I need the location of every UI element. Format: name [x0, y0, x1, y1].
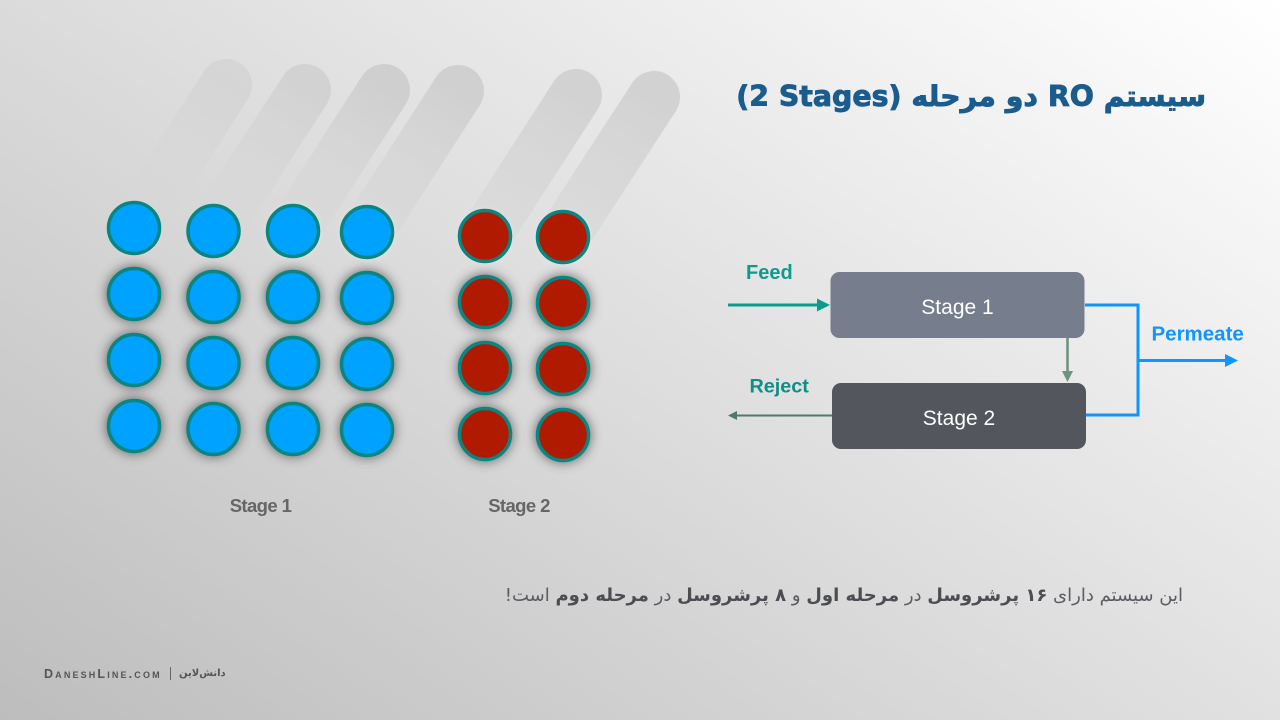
- label: feed: Feed: [746, 262, 793, 284]
- box: stage 1: Stage 1: [921, 296, 994, 319]
- footer brand: DaneshLine.com: [44, 667, 162, 681]
- arrow: feed: [728, 298, 830, 312]
- arrow: stage 1 to stage 2: [1062, 338, 1073, 382]
- box: stage 2: [832, 383, 1086, 449]
- description text: این سیستم دارای ۱۶ پرشروسل در مرحله اول و ۸ پرشروسل در مرحله دوم است!: [505, 585, 1183, 606]
- footer brand: [44, 667, 226, 681]
- vessel bodies receding in perspective: [134, 85, 654, 237]
- box: stage 2: Stage 2: [923, 407, 995, 430]
- label: permeate: Permeate: [1152, 322, 1244, 346]
- title: سیستم RO دو مرحله (2 Stages): [736, 80, 1206, 113]
- box: stage 1: [830, 272, 1084, 338]
- stage 2 vessels: 8 red circles: [460, 210, 588, 460]
- label: stage 2: Stage 2: [488, 495, 550, 516]
- circle shadows: [106, 266, 591, 463]
- arrow: permeate collector: [1085, 305, 1238, 415]
- stage 1 vessels: 16 blue circles: [108, 202, 392, 456]
- label: reject: Reject: [750, 376, 809, 398]
- arrow: reject: [728, 411, 832, 420]
- label: stage 1: Stage 1: [230, 495, 292, 516]
- footer brand: دانش‌لاین: [179, 668, 226, 679]
- first row light halo: [265, 203, 591, 265]
